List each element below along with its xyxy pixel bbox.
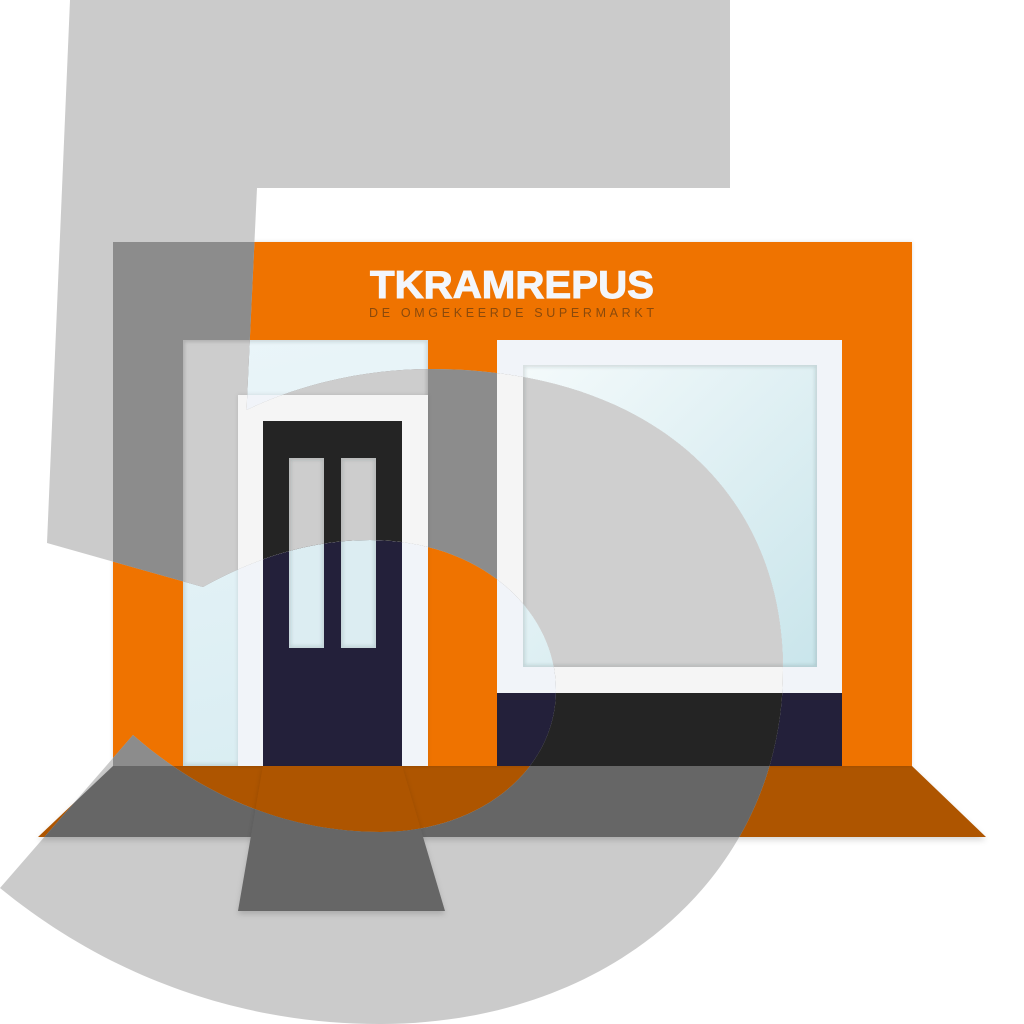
glass edge shading (289, 365, 817, 667)
tagline: DE OMGEKEERDE SUPERMARKT (369, 306, 654, 320)
left glass panel (183, 340, 428, 766)
door (263, 421, 402, 766)
shop window frame (497, 340, 842, 693)
shop name: TKRAMREPUS (370, 264, 654, 307)
doormat (238, 766, 445, 911)
storefront (38, 242, 986, 911)
door window left (289, 458, 324, 648)
door frame (238, 395, 428, 766)
wall (113, 242, 912, 766)
large numeral 5 overlay (0, 0, 783, 1024)
door window right (341, 458, 376, 648)
shop window glass (523, 365, 817, 667)
shop window base (497, 693, 842, 766)
floor (38, 766, 986, 837)
